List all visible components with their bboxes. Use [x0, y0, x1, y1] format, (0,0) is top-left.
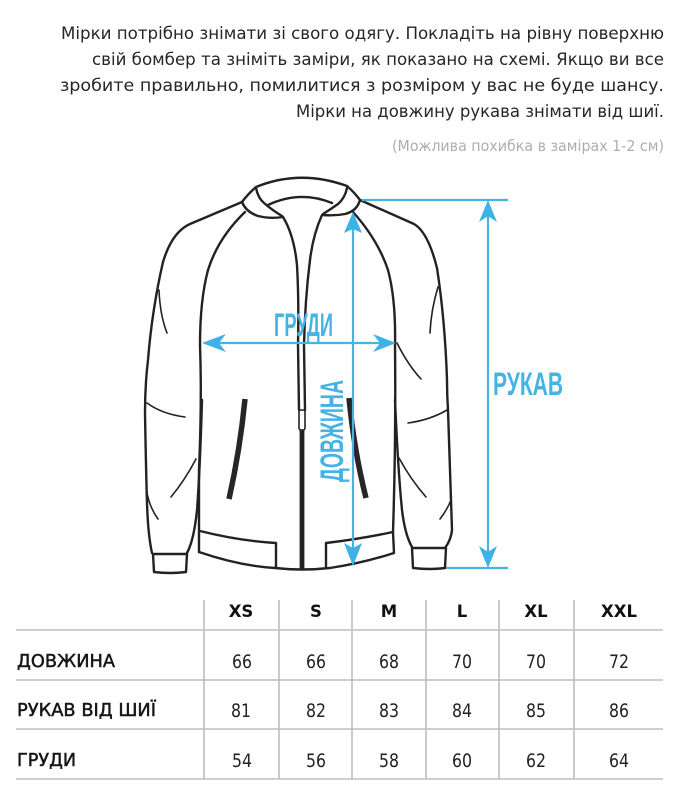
table header: S [310, 602, 322, 621]
row: sleeve from neck: 82 [306, 701, 326, 722]
intro text: зробите правильно, помилитися з розміром у вас не буде шансу. [60, 75, 664, 95]
table header: XS [229, 602, 253, 621]
row: chest: 56 [306, 751, 326, 772]
measurement error note: (Можлива похибка в замірах 1-2 см) [392, 137, 664, 155]
intro text [60, 23, 664, 121]
table header: M [381, 602, 397, 621]
placket and zipper [283, 215, 322, 570]
left sleeve and body [145, 202, 245, 573]
row: length: ДОВЖИНА [17, 651, 116, 672]
intro text: свій бомбер та зніміть заміри, як показано на схемі. Якщо ви все [92, 49, 664, 69]
label: sleeve: РУКАВ [493, 366, 563, 402]
row: sleeve from neck: 81 [231, 701, 251, 722]
table grid [16, 600, 663, 779]
row: chest: 60 [452, 751, 472, 772]
row: sleeve from neck: 84 [452, 701, 472, 722]
row: sleeve from neck [17, 700, 629, 722]
row: chest: 58 [379, 751, 399, 772]
row: sleeve from neck: 85 [526, 701, 546, 722]
row: chest [17, 750, 629, 772]
row: length: 68 [379, 652, 399, 673]
intro text: Мірки потрібно знімати зі свого одягу. Покладіть на рівну поверхню [61, 23, 664, 43]
row: chest: 64 [609, 751, 629, 772]
table header [229, 602, 637, 621]
row: length: 70 [526, 652, 546, 673]
arrow: chest [202, 334, 396, 352]
row: chest: ГРУДИ [17, 750, 76, 771]
arrow: sleeve [362, 200, 508, 568]
intro text: Мірки на довжину рукава знімати від шиї. [296, 101, 664, 121]
row: length: 72 [609, 652, 629, 673]
jacket diagram [145, 178, 452, 573]
row: sleeve from neck: 83 [379, 701, 399, 722]
label: chest: ГРУДИ [274, 307, 333, 343]
collar [242, 178, 360, 218]
row: length: 70 [452, 652, 472, 673]
row: chest: 54 [232, 751, 252, 772]
table header: XXL [601, 602, 637, 621]
table header: L [457, 602, 468, 621]
row: length: 66 [232, 652, 252, 673]
right sleeve and body [353, 200, 452, 569]
row: length [17, 651, 629, 673]
label: length: ДОВЖИНА [314, 380, 350, 482]
hem and ribbing [199, 531, 394, 570]
arrow: length [344, 212, 362, 566]
pockets [229, 398, 366, 499]
row: chest: 62 [526, 751, 546, 772]
size table [16, 600, 663, 779]
row: sleeve from neck: РУКАВ ВІД ШИЇ [17, 700, 157, 721]
row: length: 66 [306, 652, 326, 673]
row: sleeve from neck: 86 [609, 701, 629, 722]
table header: XL [524, 602, 548, 621]
